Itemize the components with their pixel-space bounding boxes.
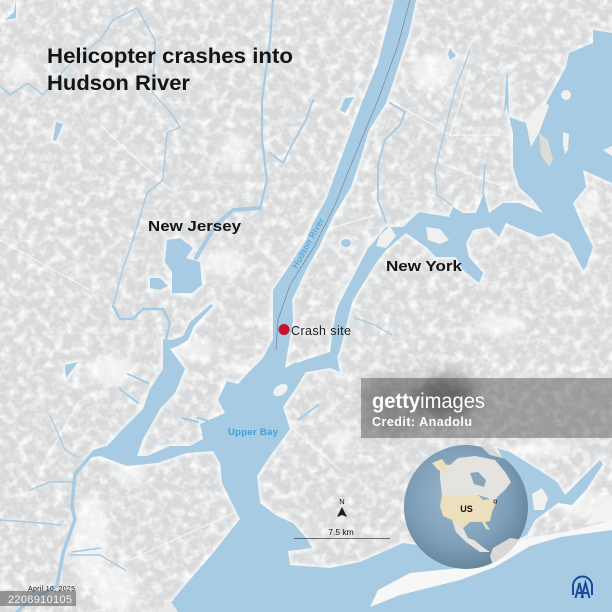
East River and Long Island Sound	[285, 30, 612, 372]
title: Hudson River	[47, 72, 190, 95]
getty watermark band	[361, 375, 612, 438]
scale bar: 7.5 km	[328, 527, 354, 537]
Hudson Bay	[470, 472, 486, 487]
Newark Bay	[88, 304, 213, 466]
Jamaica Bay marsh	[532, 488, 548, 510]
Hudson River	[264, 0, 416, 368]
image id tag: 2208910105	[8, 594, 72, 606]
globe location box	[494, 500, 496, 503]
label: Upper Bay: Upper Bay	[228, 427, 279, 438]
Meadowlands ponds	[165, 238, 202, 293]
Hudson channel line	[276, 0, 410, 350]
South America	[490, 538, 519, 563]
label: Hudson River: Hudson River	[290, 216, 326, 270]
Mexico and Central America	[452, 520, 490, 552]
United States	[440, 495, 496, 530]
north arrow	[337, 497, 347, 517]
label: New York: New York	[386, 258, 463, 275]
Alaska	[432, 459, 447, 472]
Upper Bay and Lower Bay	[127, 339, 612, 612]
label: New Jersey: New Jersey	[148, 218, 242, 235]
globe country label: US	[460, 504, 473, 514]
locator globe	[404, 445, 528, 572]
north arrow: N	[339, 497, 345, 506]
getty watermark band: Credit: Anadolu	[372, 415, 472, 429]
image id tag	[0, 591, 76, 606]
title: Helicopter crashes into	[47, 45, 293, 68]
scale bar	[294, 527, 390, 538]
marker: crash site: Crash site	[291, 324, 351, 338]
title	[47, 45, 293, 95]
Jamaica Bay	[470, 448, 603, 548]
Rockaway barrier	[370, 520, 612, 607]
AA logo	[573, 576, 592, 598]
getty watermark band: gettyimages	[372, 390, 485, 413]
islands in the sound	[157, 90, 612, 612]
date: April 10, 2025	[28, 586, 75, 593]
Canada land	[440, 456, 511, 504]
Greenland edge	[481, 447, 505, 459]
